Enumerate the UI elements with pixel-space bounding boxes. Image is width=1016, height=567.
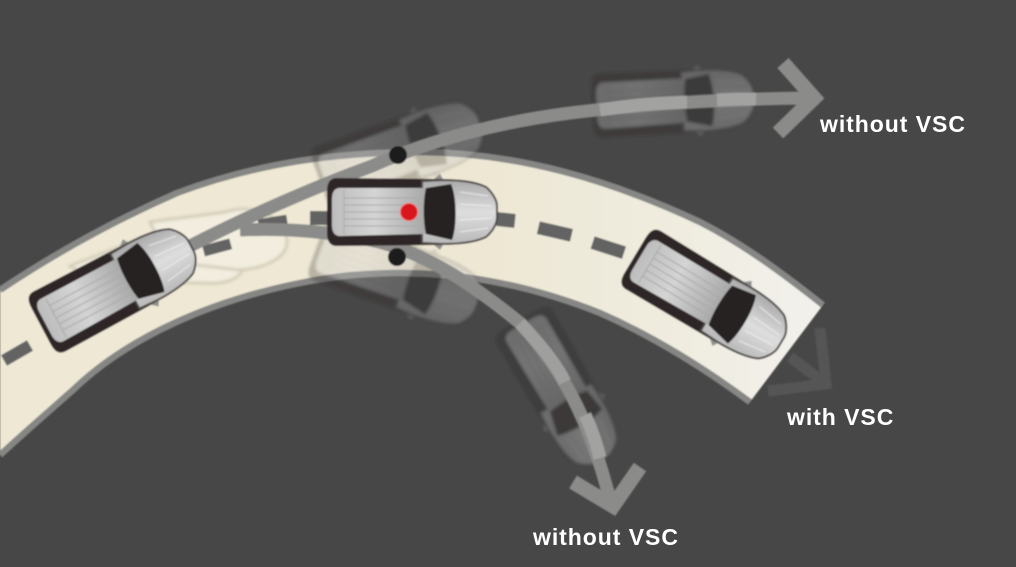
pivot dots	[388, 146, 407, 266]
ghost car: without VSC, top path	[590, 62, 756, 142]
with VSC arrow (dim)	[768, 328, 826, 391]
ghost car: top of centre	[307, 87, 493, 217]
car: right, with VSC	[616, 223, 800, 375]
red sensor dot	[400, 203, 418, 221]
ghost cars: skid positions near the left car	[70, 209, 287, 283]
arrow: without VSC, lower path	[240, 229, 640, 506]
road	[0, 152, 823, 455]
ghost car: without VSC, bottom path	[489, 302, 633, 478]
label: without VSC upper: without VSC	[819, 111, 966, 137]
label: with VSC: with VSC	[786, 404, 894, 430]
car: left, entering curve	[23, 213, 209, 359]
arrow: without VSC, upper path	[190, 63, 814, 246]
diagram	[0, 62, 826, 506]
label: without VSC lower: without VSC	[532, 524, 679, 550]
centre line dashes	[1, 211, 626, 366]
ghost car: bottom of centre	[304, 210, 490, 340]
car: centre	[327, 174, 497, 250]
